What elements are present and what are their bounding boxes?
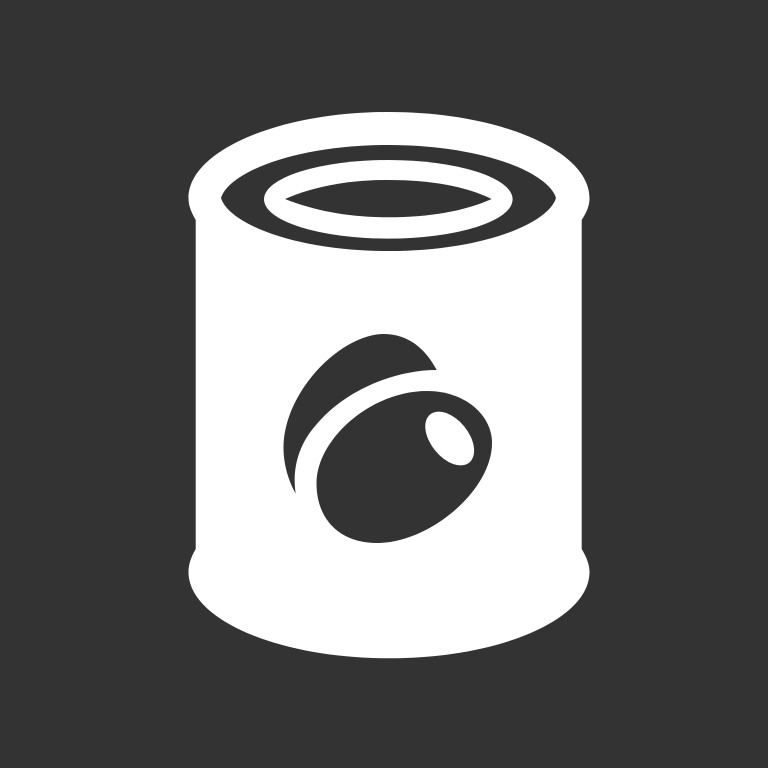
can rim opening <box>221 145 556 251</box>
icon: back olive <box>284 334 437 494</box>
can body <box>188 112 590 658</box>
icon: front olive <box>316 391 492 543</box>
